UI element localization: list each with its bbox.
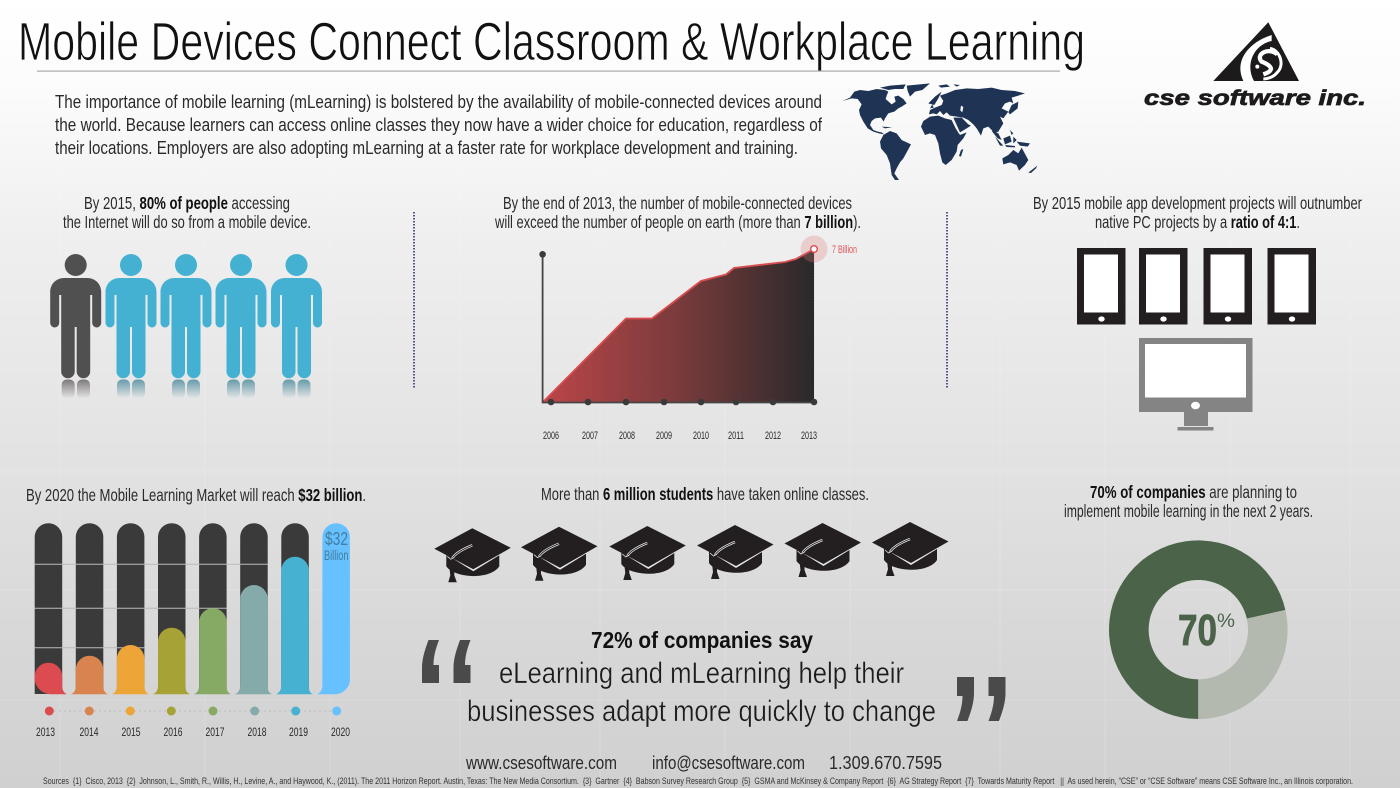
x axis years: 2013 bbox=[801, 430, 817, 442]
panel: online students bbox=[434, 484, 948, 582]
logo: cse software inc.: cse software inc. bbox=[1144, 87, 1366, 110]
heading: ratio of 4:1 bbox=[1033, 193, 1362, 232]
year labels bbox=[36, 725, 350, 739]
x axis years: 2006 bbox=[543, 430, 559, 442]
heading: 80 percent: By 2015, 80% of people accessing bbox=[84, 193, 290, 213]
icon: desktop monitor bbox=[1139, 338, 1252, 430]
heading: 80 percent bbox=[63, 193, 311, 232]
x axis years: 2010 bbox=[693, 430, 709, 442]
icon: closing quote mark bbox=[957, 677, 1006, 721]
contact details: info@csesoftware.com bbox=[652, 753, 805, 773]
intro paragraph: The importance of mobile learning (mLearning) is bolstered by the availability of mobile-connected devices around bbox=[55, 92, 822, 112]
timeline dots bbox=[45, 706, 341, 716]
contact details: www.csesoftware.com bbox=[465, 753, 617, 773]
area chart: mobile devices 2006 to 2013 bbox=[539, 236, 857, 442]
callout: 7 billion marker: 7 Billion bbox=[832, 244, 857, 256]
year labels: 2019 bbox=[289, 725, 308, 739]
x axis years: 2009 bbox=[656, 430, 672, 442]
x axis years: 2007 bbox=[582, 430, 598, 442]
panel: mobile learning market bbox=[26, 485, 366, 739]
heading: 80 percent: the Internet will do so from a mobile device. bbox=[63, 212, 311, 232]
intro paragraph bbox=[55, 92, 823, 158]
heading: 32 billion: By 2020 the Mobile Learning Market will reach $32 billion. bbox=[26, 485, 366, 505]
year labels: 2017 bbox=[206, 725, 225, 739]
donut chart: 70 percent: 70 bbox=[1178, 606, 1217, 655]
year labels: 2013 bbox=[36, 725, 55, 739]
heading: 7 billion: will exceed the number of people on earth (more than 7 billion). bbox=[494, 212, 861, 232]
x axis years: 2008 bbox=[619, 430, 635, 442]
bar chart: market growth 2013 to 2020: Billion bbox=[324, 548, 348, 563]
donut chart: 70 percent: % bbox=[1217, 611, 1235, 632]
panel: 70 percent of companies bbox=[1064, 482, 1313, 719]
year labels: 2014 bbox=[80, 725, 99, 739]
heading: ratio of 4:1: native PC projects by a ratio of 4:1. bbox=[1095, 212, 1300, 232]
year labels: 2020 bbox=[331, 725, 350, 739]
icon: row of five people bbox=[50, 254, 322, 398]
panel: devices vs people bbox=[494, 193, 861, 442]
x axis years bbox=[543, 430, 817, 442]
intro paragraph: the world. Because learners can access online classes they now have a wider choice for education, regardless of bbox=[55, 115, 823, 135]
x axis years: 2011 bbox=[728, 430, 744, 442]
bar chart: market growth 2013 to 2020 bbox=[35, 523, 350, 694]
year labels: 2018 bbox=[248, 725, 267, 739]
year labels: 2016 bbox=[164, 725, 183, 739]
year labels: 2015 bbox=[122, 725, 141, 739]
icon: world map bbox=[842, 83, 1037, 180]
callout: 7 billion marker bbox=[800, 236, 857, 262]
contact details bbox=[465, 753, 942, 773]
heading: 7 billion: By the end of 2013, the number of mobile-connected devices bbox=[503, 193, 852, 213]
intro paragraph: their locations. Employers are also adopting mLearning at a faster rate for workplace development and training. bbox=[55, 138, 798, 158]
contact details: 1.309.670.7595 bbox=[829, 753, 942, 773]
quote text: eLearning and mLearning help their bbox=[499, 657, 904, 690]
quote text bbox=[467, 627, 936, 728]
heading: 6 million students: More than 6 million students have taken online classes. bbox=[541, 484, 869, 504]
heading: 7 billion bbox=[494, 193, 861, 232]
icon: four mobile devices bbox=[1077, 248, 1316, 324]
bar chart: market growth 2013 to 2020: $32 bbox=[325, 529, 348, 549]
quote text: 72% of companies say bbox=[591, 627, 813, 653]
quote text: businesses adapt more quickly to change bbox=[467, 695, 936, 728]
panel: app development ratio bbox=[1033, 193, 1362, 430]
icon: opening quote mark bbox=[422, 640, 470, 683]
logo: cse software inc. bbox=[1144, 22, 1366, 110]
panel: 80 percent of people bbox=[50, 193, 322, 398]
x axis years: 2012 bbox=[765, 430, 781, 442]
heading: 70 percent bbox=[1064, 482, 1313, 521]
heading: 70 percent: 70% of companies are planning to bbox=[1090, 482, 1297, 502]
panel: quote bbox=[422, 627, 1006, 728]
icon: six graduation caps bbox=[434, 522, 948, 582]
donut chart: 70 percent bbox=[1109, 540, 1288, 719]
title: Mobile Devices Connect Classroom & Workplace Learning bbox=[18, 12, 1085, 72]
